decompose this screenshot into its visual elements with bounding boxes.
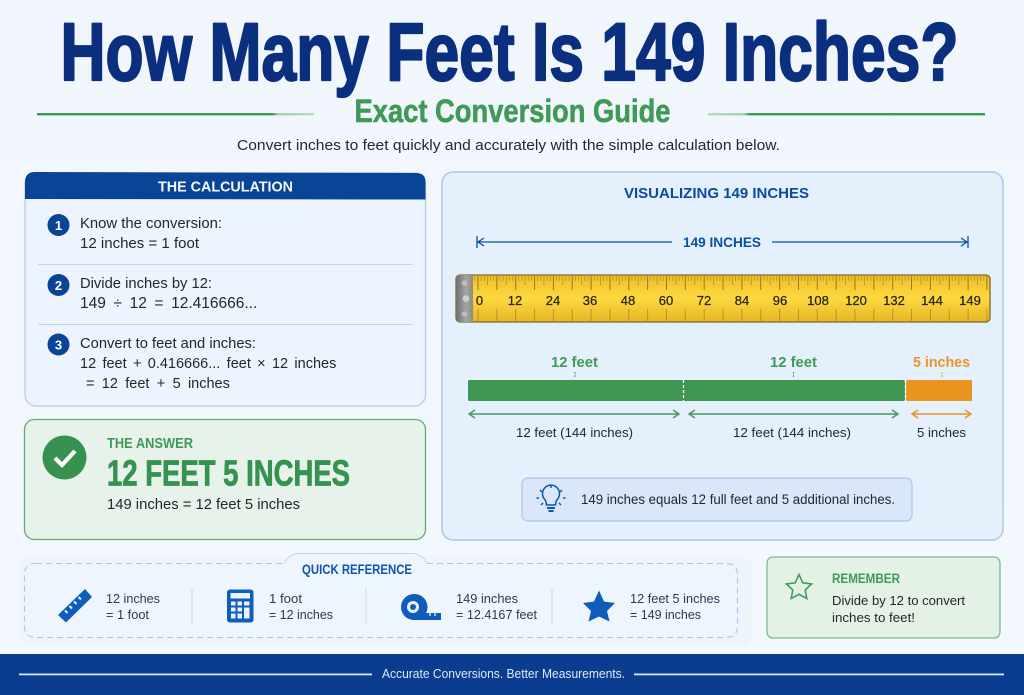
answer note: 149 inches = 12 feet 5 inches [107,497,300,513]
step 1: 1 [55,218,62,233]
step 1: Know the conversion: [80,216,222,232]
quick reference heading: QUICK REFERENCE [302,562,412,577]
tape measure: 60 [659,293,673,308]
icon: calculator [227,590,254,622]
icon: check mark [42,436,86,480]
item: 149 inches [401,592,538,622]
tape measure: 144 [921,293,943,308]
item: 12 inches [58,589,160,622]
tape measure [456,275,990,322]
step 2 [48,274,257,312]
callout: key takeaway: 149 inches equals 12 full feet and 5 additional inches. [581,492,895,507]
step 2: 2 [55,278,62,293]
dimension arrow: 149 inches [477,234,968,250]
span labels [516,425,967,440]
tape measure: 48 [621,293,635,308]
remember text: inches to feet! [832,611,915,625]
tape measure: 0 [476,293,483,308]
icon: light bulb [536,485,566,511]
step 1: 12 inches = 1 foot [80,236,199,252]
calculation header: THE CALCULATION [158,178,293,196]
item: 1 foot: = 12 inches [269,608,333,622]
tape measure: 96 [773,293,787,308]
remember text: Divide by 12 to convert [832,594,966,608]
item: 12 inches: 12 inches [106,592,160,606]
intro text: Convert inches to feet quickly and accurately with the simple calculation below. [237,138,780,154]
tape measure: 12 [508,293,522,308]
step 2: 149 ÷ 12 = 12.416666... [80,295,257,312]
step 2: Divide inches by 12: [80,276,212,292]
item: 1 foot [227,590,333,622]
step 3: Convert to feet and inches: [80,336,256,352]
tape measure: 120 [845,293,867,308]
item: 12 feet 5 inches: 12 feet 5 inches [630,592,720,606]
callout: key takeaway [522,478,912,521]
step 3: = 12 feet + 5 inches [86,376,230,392]
tape measure: 24 [546,293,560,308]
span labels: 12 feet (144 inches) [516,425,633,440]
segment labels: 12 feet [770,354,817,371]
panel heading: VISUALIZING 149 INCHES [624,185,809,202]
span labels: 12 feet (144 inches) [733,425,851,440]
tape measure: 108 [807,293,829,308]
tape measure: 72 [697,293,711,308]
item: 149 inches: = 12.4167 feet [456,608,538,622]
item: 149 inches: 149 inches [456,592,518,606]
segmented bar [468,380,972,401]
panel: the calculation [25,172,426,406]
panel: the answer [24,420,426,540]
tape measure: 36 [583,293,597,308]
step 3: 12 feet + 0.416666... feet × 12 inches [80,356,336,372]
icon: star outline [786,574,812,598]
step 3 [48,334,336,392]
step 1 [48,214,222,252]
answer label: THE ANSWER [107,436,193,452]
icon: tape measure [401,594,441,620]
tape measure: 149 [959,293,981,308]
item: 12 feet 5 inches [583,590,720,622]
subtitle: Exact Conversion Guide [354,93,670,129]
remember heading: REMEMBER [832,571,900,586]
item: 12 feet 5 inches: = 149 inches [630,608,701,622]
footer [0,654,1024,695]
tape measure: 84 [735,293,749,308]
footer: Accurate Conversions. Better Measurements. [382,667,625,681]
dimension arrow: 149 inches: 149 INCHES [683,234,761,250]
answer value: 12 FEET 5 INCHES [107,452,350,494]
segment labels: 5 inches [913,354,970,371]
step 3: 3 [55,338,62,352]
span arrows [469,410,971,418]
icon: star [583,590,615,622]
panel: quick reference [20,553,752,646]
panel: remember [767,557,1000,638]
item: 1 foot: 1 foot [269,592,303,606]
remember text [832,594,966,625]
calculation header [25,172,426,200]
tape measure: 132 [883,293,905,308]
span labels: 5 inches [917,425,967,440]
item: 12 inches: = 1 foot [106,608,150,622]
panel: visualizing 149 inches [442,172,1003,540]
segment labels [551,354,970,378]
segment labels: 12 feet [551,354,598,371]
icon: ruler [58,589,92,622]
